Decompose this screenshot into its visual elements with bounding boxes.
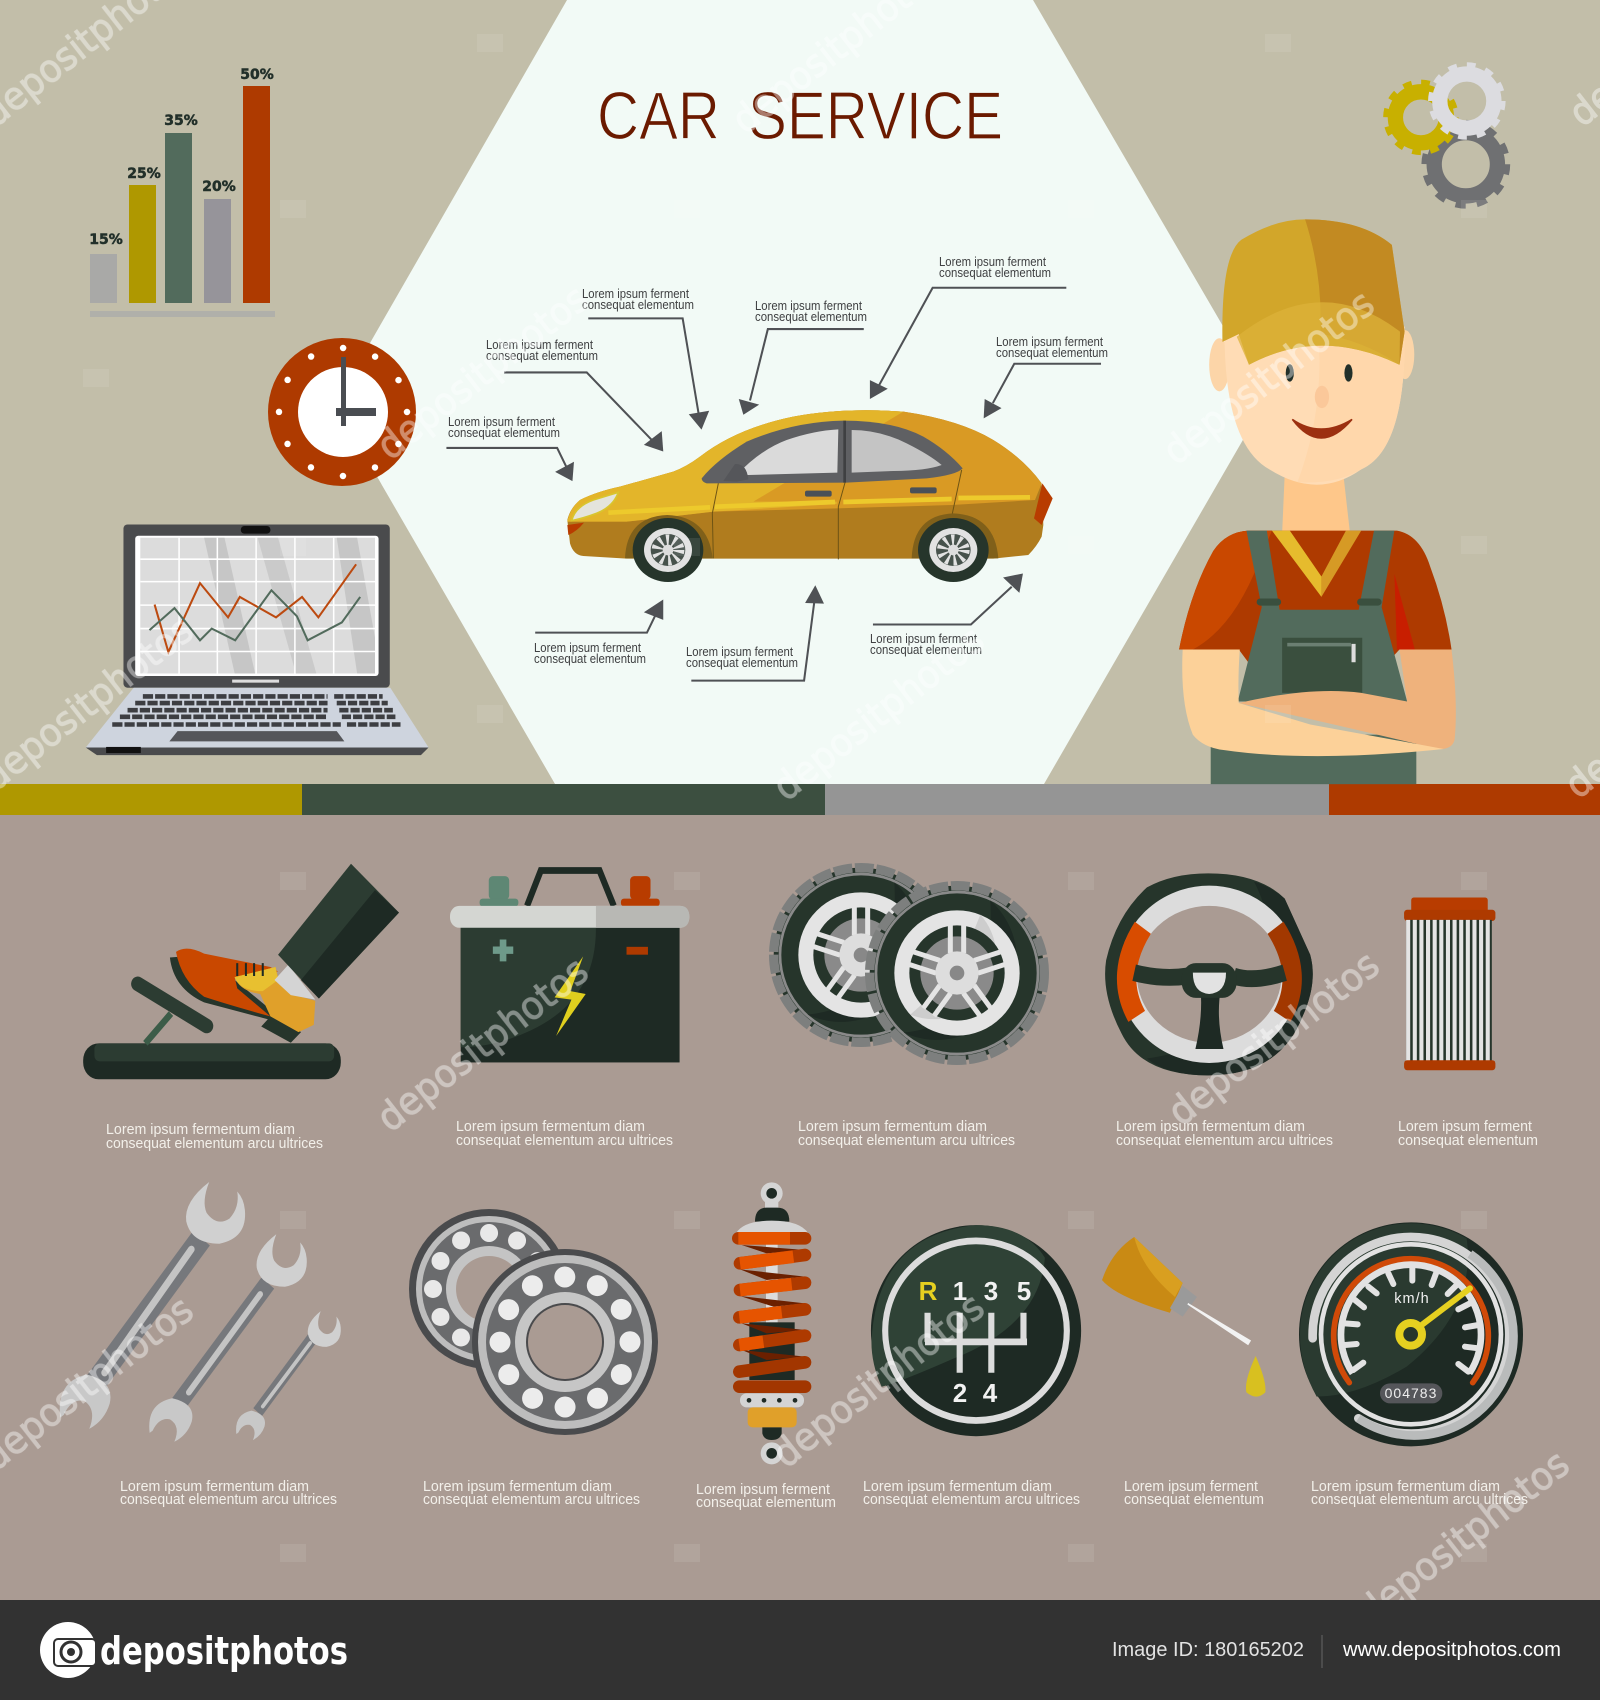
watermarks: depositphotos bbox=[764, 617, 992, 809]
icon: clock bbox=[268, 338, 416, 486]
icon: laptop with line chart bbox=[86, 524, 429, 755]
captions top row: Lorem ipsum fermentum diam bbox=[456, 1118, 645, 1135]
title bbox=[597, 78, 1003, 154]
icon: ball bearings bbox=[409, 1209, 658, 1435]
callout labels: consequat elementum bbox=[939, 266, 1051, 280]
captions top row: consequat elementum arcu ultrices bbox=[456, 1132, 673, 1149]
icon: foot on pedal bbox=[83, 864, 399, 1079]
captions bottom row: Lorem ipsum fermentum diam bbox=[1311, 1478, 1500, 1495]
icon: speedometer bbox=[1299, 1222, 1523, 1446]
captions top row: Lorem ipsum fermentum diam bbox=[106, 1121, 295, 1138]
icon: oil dropper bbox=[1102, 1237, 1265, 1397]
captions bottom row bbox=[120, 1478, 1528, 1511]
callout labels: consequat elementum bbox=[870, 643, 982, 657]
icon: car battery bbox=[450, 871, 689, 1062]
icon: gear shift: R bbox=[919, 1276, 938, 1306]
callout arrows bbox=[446, 288, 1101, 681]
icon: gear shift bbox=[871, 1225, 1081, 1436]
watermarks: depositphotos bbox=[764, 1284, 992, 1476]
callout labels: consequat elementum bbox=[448, 426, 560, 440]
bar chart: 15% bbox=[89, 232, 123, 248]
bar chart: 20% bbox=[202, 179, 236, 195]
callout labels: consequat elementum bbox=[582, 298, 694, 312]
watermarks: depositphotos bbox=[1154, 281, 1382, 473]
title: CAR bbox=[597, 78, 720, 154]
captions top row bbox=[106, 1118, 1538, 1152]
watermarks: depositphotos bbox=[1349, 1441, 1577, 1633]
callout labels: Lorem ipsum ferment bbox=[996, 335, 1103, 349]
icon: oil filter bbox=[1404, 897, 1495, 1070]
bar chart: 35% bbox=[164, 113, 198, 129]
central hexagon panel bbox=[335, 0, 1266, 784]
icon: speedometer: km/h bbox=[1394, 1291, 1430, 1307]
colour strip bbox=[0, 784, 1600, 815]
icon: gear shift: 3 bbox=[984, 1276, 998, 1306]
captions bottom row: consequat elementum arcu ultrices bbox=[423, 1491, 640, 1508]
illustration: mechanic bbox=[1179, 219, 1456, 784]
icon: steering wheel bbox=[1105, 873, 1313, 1075]
bar chart: 50% bbox=[240, 67, 274, 83]
captions bottom row: Lorem ipsum ferment bbox=[1124, 1478, 1259, 1495]
callout labels: consequat elementum bbox=[534, 652, 646, 666]
captions bottom row: consequat elementum arcu ultrices bbox=[120, 1491, 337, 1508]
callout labels: Lorem ipsum ferment bbox=[582, 287, 689, 301]
callout labels: Lorem ipsum ferment bbox=[870, 632, 977, 646]
icon: speedometer: 004783 bbox=[1385, 1385, 1437, 1401]
captions top row: consequat elementum arcu ultrices bbox=[106, 1135, 323, 1152]
icon: gear shift: 4 bbox=[983, 1378, 998, 1408]
icon: gear shift: 5 bbox=[1017, 1276, 1031, 1306]
callout labels: Lorem ipsum ferment bbox=[686, 645, 793, 659]
callout labels: consequat elementum bbox=[486, 349, 598, 363]
bar chart: 25% bbox=[127, 166, 161, 182]
watermarks: depositphotos bbox=[1159, 942, 1387, 1134]
captions top row: consequat elementum arcu ultrices bbox=[1116, 1132, 1333, 1149]
icon: gear shift: 1 bbox=[953, 1276, 967, 1306]
icon: two car wheels bbox=[774, 868, 1044, 1060]
lower panel background bbox=[0, 815, 1600, 1600]
callout labels: Lorem ipsum ferment bbox=[534, 641, 641, 655]
captions top row: Lorem ipsum ferment bbox=[1398, 1118, 1533, 1135]
callout labels: consequat elementum bbox=[996, 346, 1108, 360]
upper panel background bbox=[0, 0, 1600, 784]
callout labels: Lorem ipsum ferment bbox=[448, 415, 555, 429]
captions bottom row: Lorem ipsum fermentum diam bbox=[863, 1478, 1052, 1495]
icon: shock absorber bbox=[736, 1182, 808, 1464]
callout labels: consequat elementum bbox=[755, 310, 867, 324]
callout labels: Lorem ipsum ferment bbox=[486, 338, 593, 352]
captions bottom row: Lorem ipsum fermentum diam bbox=[423, 1478, 612, 1495]
callout labels: Lorem ipsum ferment bbox=[755, 299, 862, 313]
captions bottom row: consequat elementum bbox=[696, 1494, 836, 1511]
captions top row: consequat elementum arcu ultrices bbox=[798, 1132, 1015, 1149]
footer logo text: depositphotos bbox=[100, 1629, 348, 1673]
callout labels: Lorem ipsum ferment bbox=[939, 255, 1046, 269]
icon: gear shift: 2 bbox=[953, 1378, 967, 1408]
captions top row: Lorem ipsum fermentum diam bbox=[1116, 1118, 1305, 1135]
watermarks: depositphotos bbox=[368, 276, 596, 468]
callout labels: consequat elementum bbox=[686, 656, 798, 670]
captions top row: Lorem ipsum fermentum diam bbox=[798, 1118, 987, 1135]
captions bottom row: Lorem ipsum fermentum diam bbox=[120, 1478, 309, 1495]
callout labels bbox=[448, 255, 1108, 670]
bar chart bbox=[89, 67, 275, 317]
footer bar bbox=[0, 1600, 1600, 1700]
watermarks: depositphotos bbox=[368, 948, 596, 1140]
captions bottom row: consequat elementum arcu ultrices bbox=[863, 1491, 1080, 1508]
icon: footer logo camera bbox=[40, 1622, 96, 1678]
footer image id: Image ID: 180165202 bbox=[1112, 1639, 1304, 1661]
icon: gears bbox=[1386, 65, 1507, 205]
title: SERVICE bbox=[748, 78, 1003, 154]
icon: wrenches bbox=[60, 1182, 341, 1442]
footer website: www.depositphotos.com bbox=[1342, 1639, 1561, 1661]
watermark camera marks bbox=[83, 34, 1487, 1562]
captions bottom row: consequat elementum arcu ultrices bbox=[1311, 1491, 1528, 1508]
icon: yellow car bbox=[567, 410, 1053, 582]
captions top row: consequat elementum bbox=[1398, 1132, 1538, 1149]
captions bottom row: consequat elementum bbox=[1124, 1491, 1264, 1508]
captions bottom row: Lorem ipsum ferment bbox=[696, 1481, 831, 1498]
